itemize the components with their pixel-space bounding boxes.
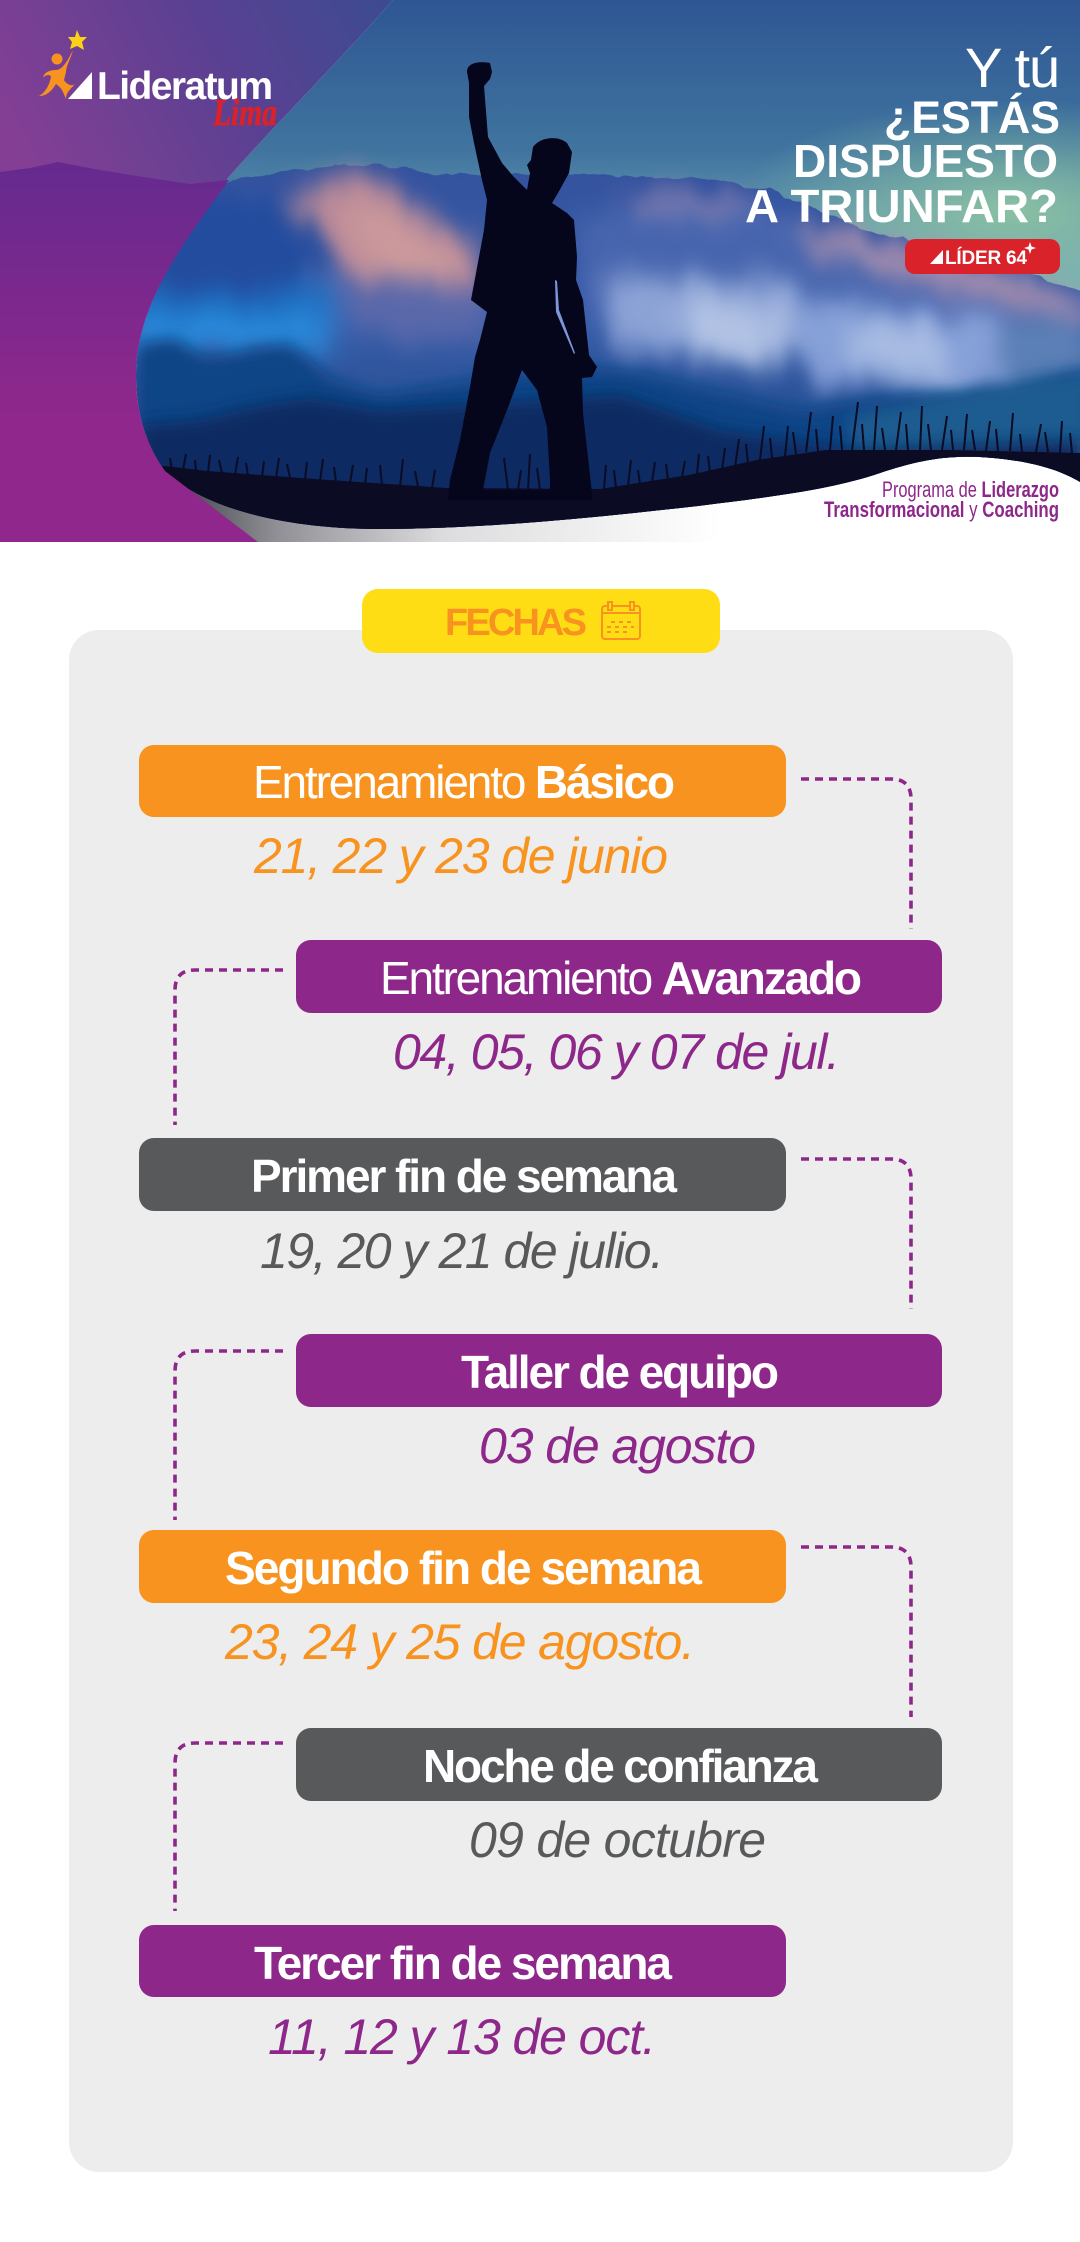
subtitle line 1: Programa de Liderazgo: [882, 477, 1059, 502]
soft cloud colours: [130, 172, 1080, 395]
lilac foot: [310, 270, 490, 345]
icon: calendar: [602, 602, 640, 639]
item: Taller de equipo: Taller de equipo: [461, 1346, 779, 1398]
headline: [746, 46, 1058, 222]
lower right blue: [1000, 320, 1080, 380]
cloud bank: [100, 165, 1080, 542]
headline line 4: A TRIUNFAR?: [745, 180, 1058, 232]
headline line 1: Y tú: [965, 36, 1060, 99]
logo Lima: Lima: [212, 92, 277, 134]
right cloud band: [580, 206, 971, 314]
item: Tercer fin de semana: 11, 12 y 13 de oct.: [268, 2009, 656, 2065]
item: Entrenamiento Basico: 21, 22 y 23 de junio: [253, 828, 668, 884]
connector: Segundo fin to Noche: [801, 1547, 911, 1717]
subtitle line 2: Transformacional y Coaching: [824, 497, 1059, 522]
logo wordmark: Lideratum: [97, 65, 273, 108]
connector: Avanzado to Primer fin: [175, 970, 283, 1125]
swoosh under photo: [148, 440, 656, 542]
left lagoon: [130, 290, 340, 318]
connector: Primer fin to Taller: [801, 1159, 911, 1309]
item: Entrenamiento Basico: Entrenamiento Básico: [253, 756, 675, 808]
photo: sky, clouds and silhouette: [100, 0, 1080, 542]
item: Segundo fin de semana: Segundo fin de semana: [225, 1542, 702, 1594]
pink peak: [292, 172, 482, 300]
left mountain blue: [156, 180, 332, 301]
program subtitle: [824, 481, 1058, 522]
item: Noche de confianza: Noche de confianza: [423, 1740, 818, 1792]
item: Noche de confianza: [296, 1728, 942, 1868]
distant hills: [136, 338, 1080, 542]
item: Primer fin de semana: 19, 20 y 21 de julio.: [260, 1223, 664, 1279]
sky: [227, 0, 1080, 291]
hero banner: [0, 0, 1080, 542]
connector: Taller to Segundo fin: [175, 1351, 283, 1520]
logo star: [68, 30, 87, 50]
item: Primer fin de semana: Primer fin de semana: [251, 1150, 677, 1202]
item: Tercer fin de semana: [139, 1925, 786, 2065]
panel: dates: [69, 630, 1013, 2172]
sky green glow: [776, 111, 1080, 278]
badge: Lider 64: [905, 239, 1060, 274]
item: Entrenamiento Avanzado: [296, 940, 942, 1080]
item: Segundo fin de semana: 23, 24 y 25 de agosto.: [224, 1614, 695, 1670]
item: Taller de equipo: [296, 1334, 942, 1474]
item: Entrenamiento Avanzado: 04, 05, 06 y 07 de jul.: [393, 1024, 840, 1080]
item: Segundo fin de semana: [139, 1530, 786, 1670]
logo triangle: [68, 72, 92, 99]
item: Tercer fin de semana: Tercer fin de semana: [254, 1937, 672, 1989]
light gap between arm and torso: [555, 280, 575, 354]
ground: [162, 450, 1080, 529]
purple upper panel: [0, 0, 393, 185]
connector: Noche to Tercer fin: [175, 1743, 283, 1911]
item: Noche de confianza: 09 de octubre: [469, 1812, 766, 1868]
connector: Basico to Avanzado: [801, 779, 911, 929]
grass: [170, 402, 1072, 490]
heading pill: Fechas: [362, 589, 720, 653]
heading text: FECHAS: [445, 602, 587, 644]
badge: Lider 64: LÍDER 64: [945, 247, 1027, 269]
purple lower panel with mountain: [0, 162, 258, 542]
teal slope right: [850, 372, 1080, 470]
dark forest ridge: [140, 395, 1080, 542]
person silhouette: [448, 62, 597, 500]
item: Entrenamiento Basico: [139, 745, 786, 884]
waterfall whites: [600, 275, 810, 360]
headline line 3: DISPUESTO: [793, 135, 1058, 187]
item: Taller de equipo: 03 de agosto: [479, 1418, 756, 1474]
logo figure: [39, 50, 75, 99]
headline line 2: ¿ESTÁS: [884, 92, 1060, 143]
item: Entrenamiento Avanzado: Entrenamiento Avanzado: [380, 952, 862, 1004]
logo: [39, 30, 277, 134]
item: Primer fin de semana: [139, 1138, 786, 1279]
